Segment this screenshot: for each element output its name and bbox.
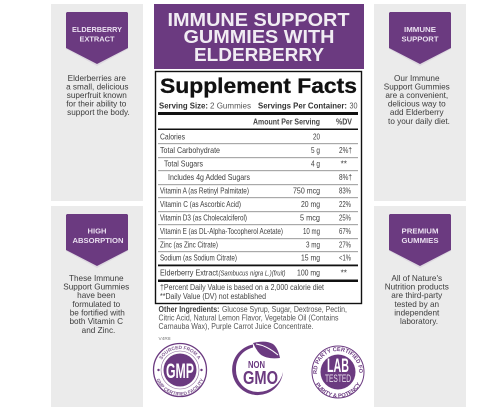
text: immune support description: Support Gummies — [384, 82, 450, 92]
nutrition rows: ** — [341, 160, 348, 168]
text: premium description: Nutrition products — [385, 282, 449, 292]
text: elderberry description: a small, delicious — [66, 82, 128, 92]
panel: premium gummies — [374, 206, 466, 407]
text: premium description: independent — [394, 308, 440, 318]
title banner — [154, 4, 364, 69]
panel: immune support — [374, 4, 466, 201]
table header: %DV — [336, 118, 353, 126]
nutrition rows: Sodium (as Sodium Citrate) — [160, 254, 237, 262]
text: premium description: are third-party — [391, 291, 443, 300]
other ingredients: Other Ingredients: — [158, 305, 220, 314]
nutrition rows: 5 mcg — [300, 214, 320, 222]
other ingredients — [158, 305, 347, 331]
nutrition rows: 100 mg — [297, 268, 320, 278]
icon: lab tested seal: LAB — [327, 356, 349, 377]
text: absorption description: These Immune — [69, 274, 124, 283]
title banner: GUMMIES WITH — [184, 27, 334, 47]
badge: high absorption: ABSORPTION — [72, 236, 124, 245]
nutrition rows: 8%† — [339, 173, 352, 182]
text: immune support description: Our Immune — [394, 74, 440, 83]
nutrition rows: 4 g — [311, 160, 320, 168]
text: absorption description: both Vitamin C — [69, 317, 123, 326]
icon: GMP seal: GMP CERTIFIED FACILITY — [156, 378, 204, 396]
text: immune support description: are a convenient, — [385, 91, 448, 100]
other ingredients: Citric Acid, Natural Lemon Flavor, Vegetable Oil (Contains — [158, 314, 338, 322]
text: absorption description: Support Gummies — [63, 282, 129, 292]
nutrition rows: 15 mg — [301, 254, 320, 262]
nutrition rows — [158, 132, 358, 282]
heading: supplement facts: Supplement Facts — [160, 74, 357, 98]
panel: high absorption — [51, 206, 143, 407]
nutrition rows: <1% — [339, 254, 351, 262]
nutrition rows: 10 mg — [303, 227, 320, 236]
nutrition rows: 3 mg — [306, 240, 320, 250]
text: immune support description: add Elderberry — [390, 108, 445, 117]
serving information: 2 Gummies — [210, 102, 251, 110]
text: elderberry description: Elderberries are — [68, 74, 126, 83]
badge: immune support — [389, 12, 451, 66]
nutrition rows: Total Sugars — [164, 160, 203, 168]
nutrition rows: Calories — [160, 132, 185, 142]
nutrition rows: 83% — [339, 186, 351, 196]
nutrition rows: Zinc (as Zinc Citrate) — [160, 240, 218, 250]
badge: elderberry extract: EXTRACT — [80, 34, 115, 44]
icon: GMP seal: SOURCED FROM A — [159, 346, 200, 360]
nutrition rows: 25% — [339, 214, 351, 222]
text: premium description: All of Nature's — [391, 274, 442, 283]
nutrition rows: (Sambucus nigra L.)(fruit) — [218, 268, 286, 278]
nutrition rows: 2%† — [339, 146, 352, 155]
icon: lab tested seal — [312, 346, 364, 398]
nutrition rows: Vitamin A (as Retinyl Palmitate) — [160, 186, 249, 196]
title banner: IMMUNE SUPPORT — [168, 10, 350, 30]
other ingredients: Carnauba Wax), Purple Carrot Juice Concentrate. — [158, 322, 314, 331]
nutrition rows: 750 mcg — [293, 186, 320, 196]
serving information: Servings Per Container: — [258, 102, 347, 110]
footnotes — [160, 283, 325, 301]
serving information: Serving Size: — [159, 102, 208, 110]
nutrition rows: ** — [341, 268, 348, 278]
icon: non GMO seal — [232, 342, 283, 395]
nutrition rows: 20 mg — [301, 200, 320, 209]
badge: elderberry extract — [66, 12, 128, 66]
footnotes: **Daily Value (DV) not established — [160, 292, 266, 301]
icon: lab tested seal: PURITY & POTENCY — [316, 382, 360, 398]
other ingredients: Glucose Syrup, Sugar, Dextrose, Pectin, — [222, 305, 347, 314]
nutrition rows: Elderberry Extract — [160, 268, 219, 278]
icon: non GMO seal: GMO — [243, 368, 278, 388]
icon: GMP seal — [152, 342, 208, 398]
badge: premium gummies — [389, 214, 451, 268]
nutrition rows: 22% — [339, 200, 351, 209]
icon: non GMO seal: NON — [248, 360, 265, 371]
nutrition rows: Vitamin E (as DL-Alpha-Tocopherol Acetate) — [160, 227, 283, 236]
nutrition rows: 20 — [313, 132, 320, 142]
text: immune support description: delicious way to — [388, 100, 446, 108]
nutrition rows: 27% — [339, 240, 351, 250]
text: immune support description: to your daily diet. — [388, 117, 450, 126]
badge: elderberry extract: ELDERBERRY — [72, 25, 122, 34]
text: absorption description: and Zinc. — [82, 326, 115, 335]
badge: high absorption — [66, 214, 128, 268]
nutrition rows: Vitamin D3 (as Cholecalciferol) — [160, 214, 247, 222]
nutrition rows: 67% — [339, 227, 351, 236]
table header: Amount Per Serving — [253, 118, 320, 126]
badge: immune support: SUPPORT — [402, 34, 439, 44]
badge: immune support: IMMUNE — [404, 25, 436, 34]
title banner: ELDERBERRY — [194, 45, 324, 65]
text: premium description: tested by an — [394, 300, 440, 309]
badge: premium gummies: GUMMIES — [402, 236, 439, 245]
nutrition rows: 5 g — [311, 146, 320, 155]
panel: elderberry extract — [51, 4, 143, 201]
icon: lab tested seal: 3RD PARTY CERTIFIED FOR — [313, 347, 363, 374]
serving information: 30 — [350, 102, 358, 110]
footnotes: †Percent Daily Value is based on a 2,000 calorie diet — [160, 283, 325, 292]
badge: premium gummies: PREMIUM — [402, 226, 438, 236]
nutrition rows: Vitamin C (as Ascorbic Acid) — [160, 200, 241, 209]
text: absorption description: have been — [77, 291, 116, 300]
supplement facts panel — [156, 72, 362, 304]
text: elderberry description: for their ability to — [66, 100, 127, 108]
text: absorption description: be fortified with — [70, 308, 125, 318]
nutrition rows: Includes 4g Added Sugars — [168, 173, 250, 182]
text: elderberry description: support the body. — [67, 108, 130, 117]
text: premium description: laboratory. — [400, 317, 438, 326]
icon: lab tested seal: TESTED — [325, 373, 351, 385]
icon: GMP seal: GMP — [166, 360, 194, 383]
serving information — [159, 102, 358, 110]
version code: V4R8 — [158, 336, 171, 341]
text: absorption description: formulated to — [72, 300, 121, 309]
nutrition rows: Total Carbohydrate — [160, 146, 220, 155]
text: elderberry description: superfruit known — [67, 91, 127, 100]
badge: high absorption: HIGH — [88, 226, 106, 236]
